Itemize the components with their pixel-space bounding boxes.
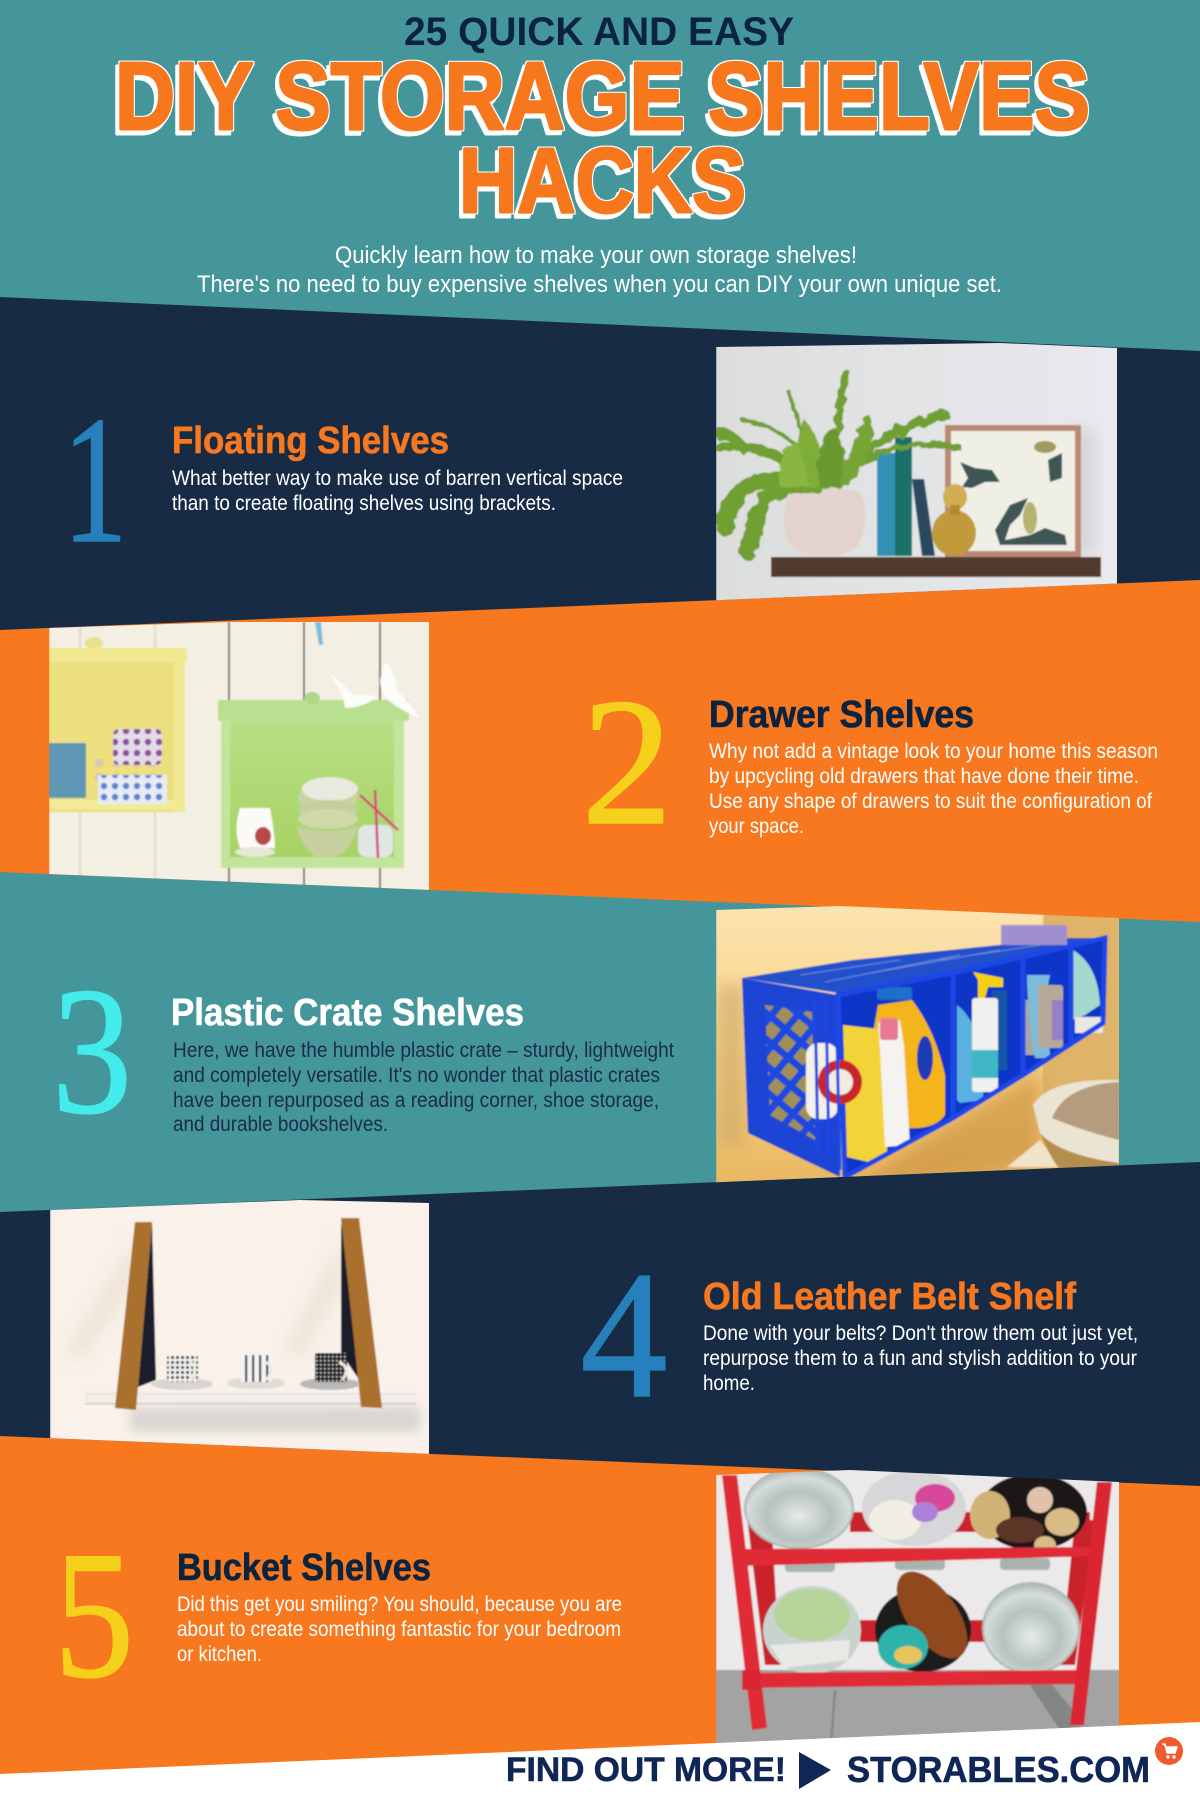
band 2: orange — [0, 580, 1200, 930]
number 3: 3 — [52, 951, 132, 1152]
body text: Use any shape of drawers to suit the configuration of — [709, 789, 1152, 813]
band 5: orange — [0, 1436, 1200, 1780]
footer band — [0, 1722, 1200, 1800]
intro paragraph: There's no need to buy expensive shelves when you can DIY your own unique set. — [197, 271, 1002, 298]
body text: and durable bookshelves. — [173, 1112, 388, 1136]
panel 2: drawer shelves — [49, 620, 1158, 892]
body text: Why not add a vintage look to your home this season — [709, 739, 1158, 763]
icon: shopping cart badge — [1155, 1737, 1183, 1765]
photo: drawer shelves — [49, 620, 430, 892]
kicker heading: 25 QUICK AND EASY — [404, 10, 794, 54]
panel 5: bucket shelves — [54, 1468, 1120, 1750]
footer label: FIND OUT MORE! — [506, 1751, 786, 1789]
footer call to action — [506, 1737, 1183, 1790]
main title: HACKS — [459, 130, 746, 232]
body text — [173, 1038, 674, 1136]
number 2: 2 — [582, 662, 672, 863]
body text — [709, 739, 1158, 838]
intro paragraph — [197, 242, 1002, 298]
body text: Done with your belts? Don't throw them out just yet, — [703, 1321, 1138, 1345]
body text: or kitchen. — [177, 1642, 262, 1666]
heading: Plastic Crate Shelves — [171, 992, 524, 1034]
body text: than to create floating shelves using brackets. — [172, 491, 556, 515]
heading: Old Leather Belt Shelf — [703, 1276, 1076, 1318]
website: STORABLES.COM — [847, 1749, 1150, 1790]
body text: and completely versatile. It's no wonder that plastic crates — [173, 1063, 660, 1087]
body text: your space. — [709, 814, 804, 838]
body text — [172, 466, 623, 515]
photo: leather belt shelf — [50, 1198, 430, 1456]
body text — [177, 1592, 622, 1666]
body text: Did this get you smiling? You should, because you are — [177, 1592, 622, 1616]
intro paragraph: Quickly learn how to make your own storage shelves! — [335, 242, 857, 269]
heading: Bucket Shelves — [177, 1547, 431, 1589]
band 4: navy — [0, 1162, 1200, 1495]
number 4: 4 — [580, 1235, 668, 1436]
panel 1: floating shelves — [62, 340, 1118, 605]
photo: plastic crate shelves — [716, 900, 1120, 1190]
body text: What better way to make use of barren vertical space — [172, 466, 623, 490]
heading: Floating Shelves — [172, 420, 449, 462]
arrow — [799, 1752, 831, 1789]
main title — [115, 43, 1090, 232]
body text: home. — [703, 1371, 755, 1395]
panel 3: plastic crate shelves — [52, 900, 1120, 1190]
panel 4: old leather belt shelf — [50, 1198, 1138, 1456]
body text: about to create something fantastic for your bedroom — [177, 1617, 621, 1641]
number 1: 1 — [62, 380, 128, 581]
photo: bucket shelves — [716, 1468, 1120, 1750]
number 5: 5 — [54, 1515, 134, 1716]
heading: Drawer Shelves — [709, 694, 974, 736]
header background band — [0, 0, 1200, 360]
plant leaves — [720, 372, 960, 552]
photo: floating shelf with plant — [716, 340, 1118, 605]
band 1: navy — [0, 297, 1200, 640]
header text block — [115, 10, 1090, 298]
band 3: teal — [0, 872, 1200, 1220]
body text: by upcycling old drawers that have done their time. — [709, 764, 1139, 788]
body text — [703, 1321, 1138, 1395]
body text: have been repurposed as a reading corner, shoe storage, — [173, 1088, 659, 1112]
body text: repurpose them to a fun and stylish addition to your — [703, 1346, 1137, 1370]
body text: Here, we have the humble plastic crate – sturdy, lightweight — [173, 1038, 674, 1062]
